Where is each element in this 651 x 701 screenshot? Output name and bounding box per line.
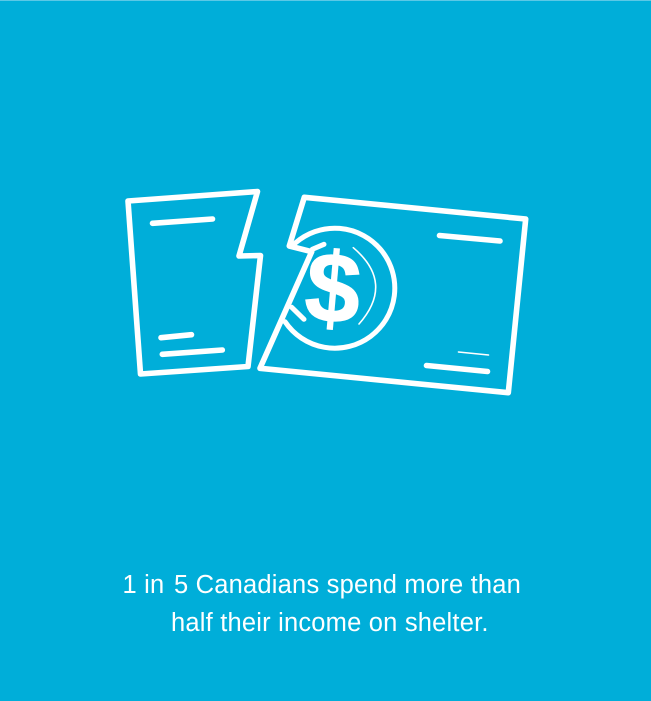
caption line 1: 5 Canadians spend more than	[174, 571, 521, 599]
caption text	[122, 571, 521, 637]
icon: dollar sign: $	[301, 230, 365, 345]
icon: torn dollar bill	[128, 192, 526, 393]
right torn piece of the bill	[260, 197, 526, 393]
caption line 2: half their income on shelter.	[171, 609, 489, 637]
coin on the bill	[285, 228, 488, 355]
caption line 1: 1 in	[122, 571, 164, 599]
left torn piece of the bill	[128, 192, 260, 374]
